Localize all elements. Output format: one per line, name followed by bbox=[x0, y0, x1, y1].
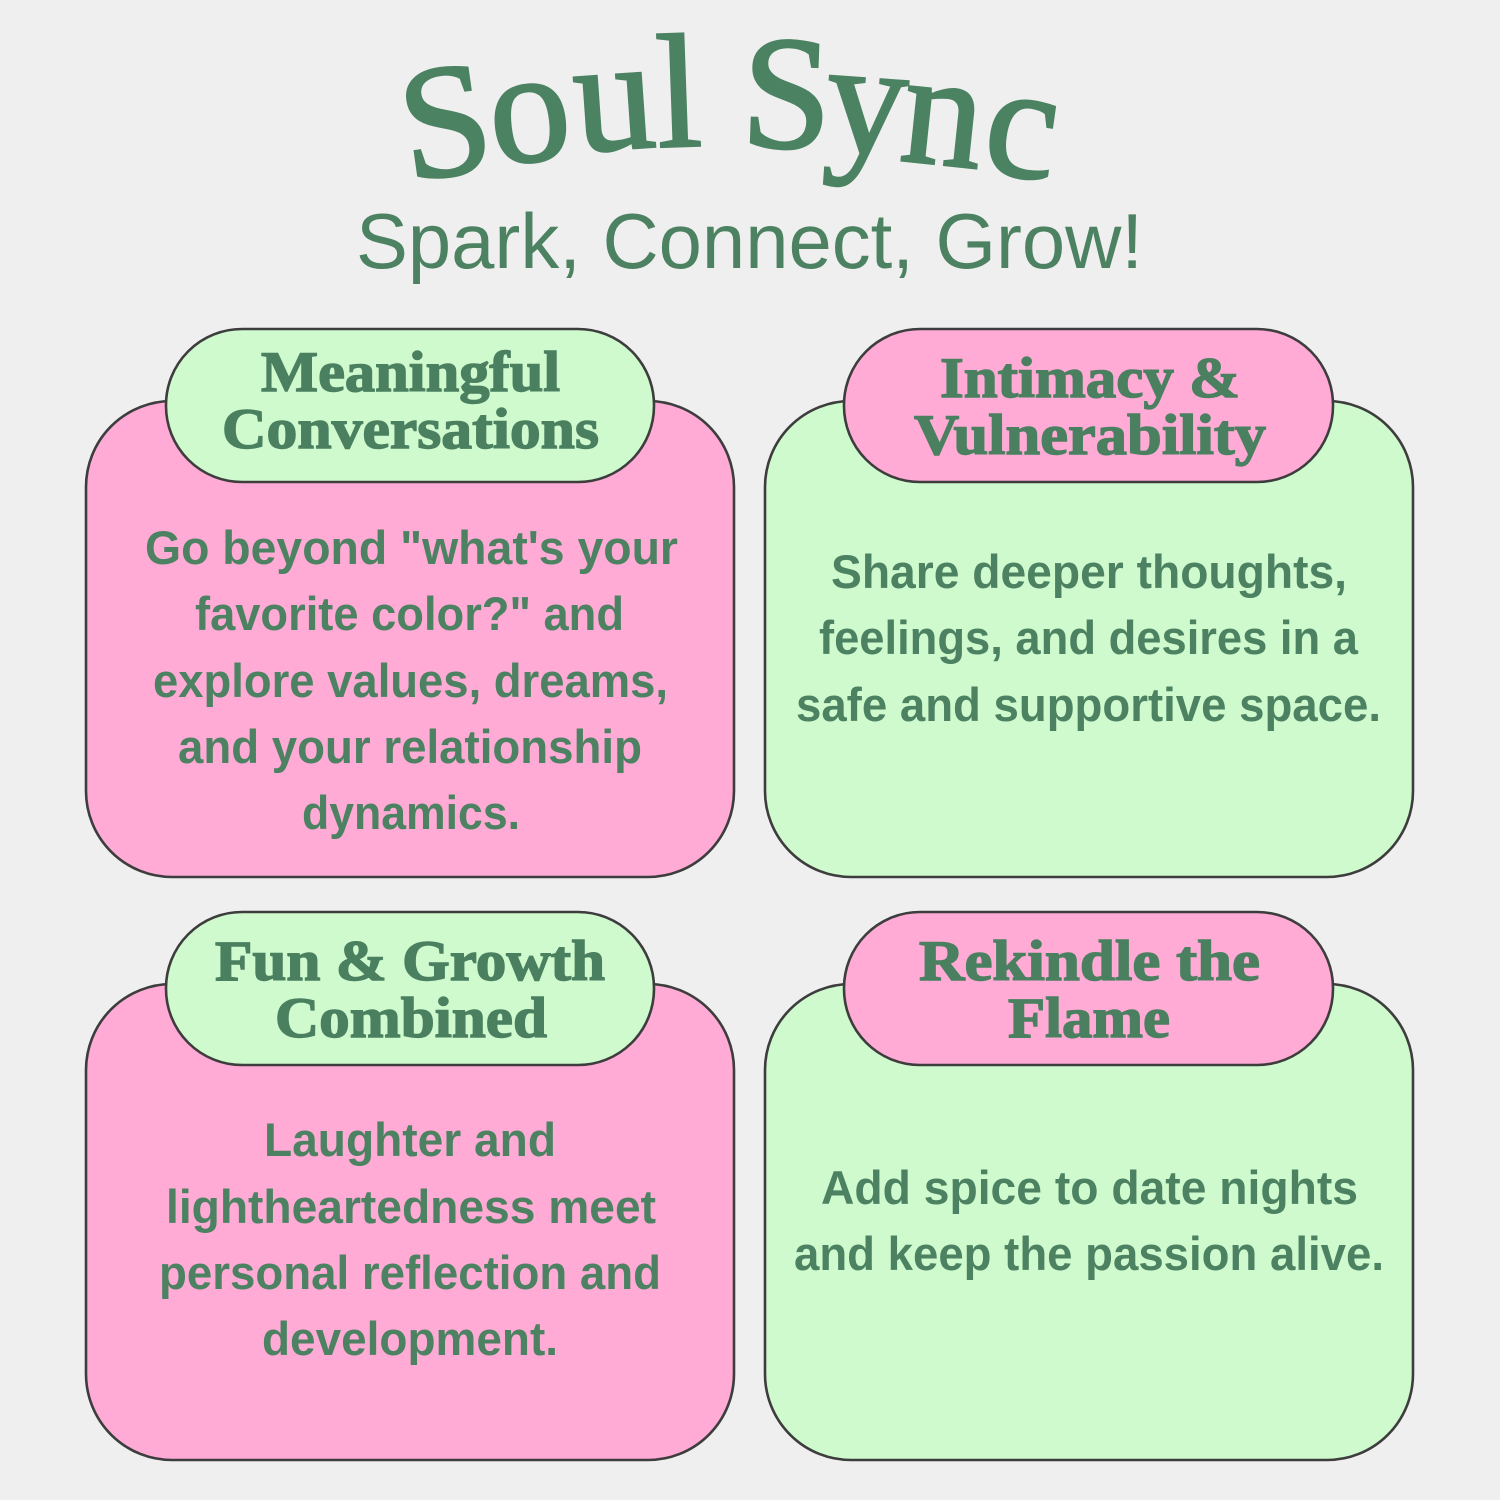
body text bbox=[145, 521, 678, 839]
panel: intimacy and vulnerability bbox=[765, 329, 1413, 877]
subtitle: Spark, Connect, Grow! bbox=[356, 197, 1143, 285]
heading pill bbox=[844, 912, 1333, 1065]
heading pill: Conversations bbox=[222, 398, 599, 461]
card background bbox=[765, 401, 1413, 877]
body text: and your relationship bbox=[178, 720, 642, 773]
card background bbox=[765, 984, 1413, 1460]
body text: feelings, and desires in a bbox=[819, 611, 1359, 664]
body text: favorite color?" and bbox=[195, 587, 624, 640]
body text: dynamics. bbox=[302, 786, 520, 839]
heading pill: Flame bbox=[1008, 987, 1170, 1050]
heading pill: Combined bbox=[275, 987, 547, 1050]
heading pill: Fun & Growth bbox=[215, 930, 605, 993]
body text: Add spice to date nights bbox=[821, 1161, 1358, 1214]
heading pill: Vulnerability bbox=[914, 404, 1266, 467]
panel: rekindle the flame bbox=[765, 912, 1413, 1460]
body text: explore values, dreams, bbox=[153, 654, 668, 707]
panel: meaningful conversations bbox=[86, 329, 734, 877]
body text bbox=[159, 1113, 661, 1365]
heading pill bbox=[166, 912, 654, 1065]
body text: development. bbox=[262, 1312, 558, 1365]
card background bbox=[86, 984, 734, 1460]
panel: fun and growth combined bbox=[86, 912, 734, 1460]
title: SoulSync bbox=[388, 3, 1071, 217]
heading pill: Rekindle the bbox=[919, 930, 1260, 993]
body text: Laughter and bbox=[264, 1113, 556, 1166]
card background bbox=[86, 401, 734, 877]
body text: personal reflection and bbox=[159, 1246, 661, 1299]
body text bbox=[794, 1161, 1384, 1280]
heading pill bbox=[844, 329, 1333, 482]
body text: safe and supportive space. bbox=[796, 678, 1381, 731]
body text bbox=[796, 545, 1381, 731]
heading pill bbox=[166, 329, 654, 482]
body text: lightheartedness meet bbox=[166, 1180, 656, 1233]
heading pill: Meaningful bbox=[261, 341, 560, 404]
body text: Share deeper thoughts, bbox=[831, 545, 1347, 598]
heading pill: Intimacy & bbox=[940, 347, 1240, 410]
body text: and keep the passion alive. bbox=[794, 1227, 1384, 1280]
body text: Go beyond "what's your bbox=[145, 521, 678, 574]
